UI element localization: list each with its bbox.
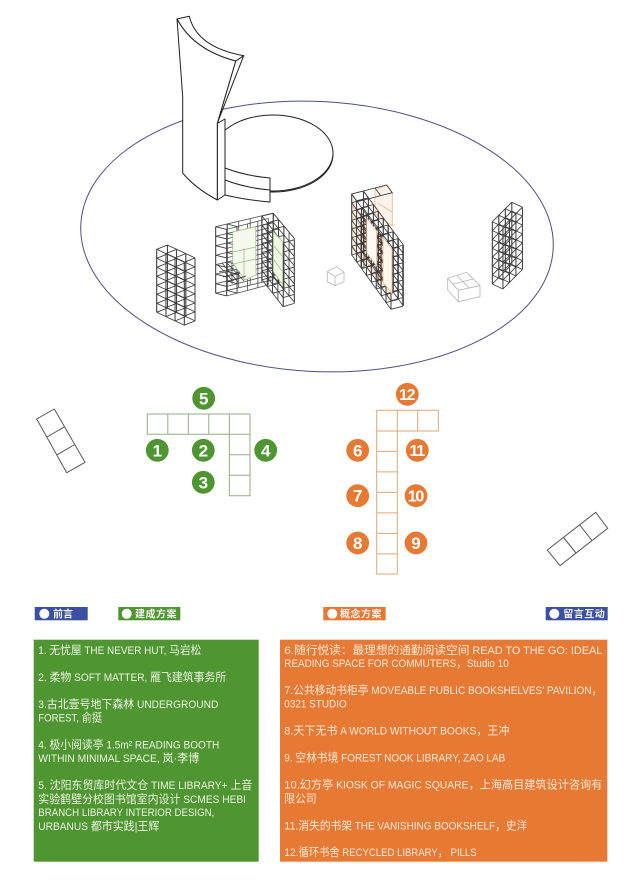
item 7: 0321 STUDIO <box>284 698 347 710</box>
grid block: left free-standing shelf <box>157 245 195 325</box>
number 7 <box>346 484 369 507</box>
item 5 <box>38 778 252 833</box>
grid block: right free-standing shelf <box>492 202 522 289</box>
item 3 <box>38 697 219 725</box>
small cube <box>327 267 344 286</box>
number 11 <box>406 439 429 462</box>
number 11: 11 <box>409 443 425 460</box>
double small cubes <box>448 272 480 302</box>
number 7: 7 <box>353 487 362 506</box>
number 8: 8 <box>353 534 362 553</box>
number 12: 12 <box>399 387 416 404</box>
circular platform <box>213 115 333 192</box>
item 4: WITHIN MINIMAL SPACE, 岚·李博 <box>38 751 199 765</box>
item 7: 7.公共移动书柜亭 MOVEABLE PUBLIC BOOKSHELVES' PAVILION， <box>284 683 602 697</box>
tag: built schemes: 建成方案 <box>135 608 176 621</box>
item 12: 12.循环书舍 RECYCLED LIBRARY， PILLS <box>284 845 477 859</box>
item 4 <box>38 738 219 765</box>
curved base wall <box>225 168 270 202</box>
grid block: orange double wall pavilion <box>352 185 403 309</box>
item 4: 4. 极小阅读亭 1.5m² READING BOOTH <box>38 738 219 752</box>
green panels <box>233 227 283 285</box>
item 6 <box>284 643 602 670</box>
number 10 <box>405 484 427 507</box>
tag: comments: 留言互动 <box>563 608 605 621</box>
item 5: 5. 沈阳东贸库时代文仓 TIME LIBRARY+ 上音 <box>38 778 252 792</box>
diagram: built schemes grid <box>146 387 277 496</box>
tag: foreword <box>35 607 88 621</box>
tag: concept schemes <box>323 607 386 621</box>
tower <box>177 16 244 200</box>
panel: built schemes list <box>34 640 259 862</box>
item 3: 3.古北壹号地下森林 UNDERGROUND <box>38 697 219 711</box>
left rotated three-cell strip <box>37 409 85 473</box>
tag: foreword: 前言 <box>53 608 73 621</box>
tag: built schemes <box>118 607 180 621</box>
right rotated three-cell strip <box>547 512 608 566</box>
number 2: 2 <box>199 441 208 460</box>
number 6: 6 <box>353 441 362 460</box>
number 12 <box>396 383 419 406</box>
tag: concept schemes: 概念方案 <box>340 608 382 621</box>
number 3: 3 <box>199 473 208 492</box>
number 9: 9 <box>411 534 421 553</box>
number 6 <box>346 439 369 462</box>
item 5: URBANUS 都市实践|王辉 <box>38 819 159 833</box>
item 5: 实验鹤壁分校图书馆室内设计 SCMES HEBI <box>38 792 246 806</box>
number 8 <box>346 532 369 554</box>
number 9 <box>405 532 427 554</box>
grid block: green L-shaped pavilion <box>216 213 294 307</box>
tag: comments <box>546 607 608 621</box>
orange-edged openings <box>367 218 392 294</box>
item 10: 限公司 <box>284 792 317 805</box>
item 1: 1. 无忧屋 THE NEVER HUT, 马岩松 <box>38 643 201 657</box>
item 10 <box>284 778 602 805</box>
item 8: 8.天下无书 A WORLD WITHOUT BOOKS，王冲 <box>284 724 509 738</box>
item 10: 10.幻方亭 KIOSK OF MAGIC SQUARE，上海高目建筑设计咨询有 <box>284 778 602 792</box>
diagram: concept schemes grid <box>346 383 438 574</box>
item 3: FOREST, 俞挺 <box>38 711 103 725</box>
panel: concept schemes list <box>280 640 607 862</box>
item 6: 6.随行悦读：最理想的通勤阅读空间 READ TO THE GO: IDEAL <box>284 643 602 657</box>
number 1: 1 <box>153 441 162 460</box>
item 9: 9. 空林书境 FOREST NOOK LIBRARY, ZAO LAB <box>284 751 505 765</box>
site plan drawing <box>74 16 560 384</box>
number 4: 4 <box>261 441 271 460</box>
item 7 <box>284 683 602 710</box>
item 6: READING SPACE FOR COMMUTERS，Studio 10 <box>284 658 509 670</box>
green grid <box>147 414 250 496</box>
number 10: 10 <box>408 488 424 505</box>
item 11: 11.消失的书架 THE VANISHING BOOKSHELF，史洋 <box>284 818 527 832</box>
item 5: BRANCH LIBRARY INTERIOR DESIGN, <box>38 807 214 819</box>
item 2: 2. 柔物 SOFT MATTER, 雁飞建筑事务所 <box>38 670 226 684</box>
orange grid <box>377 410 438 574</box>
site boundary ellipse <box>74 89 560 384</box>
number 5: 5 <box>199 389 208 408</box>
